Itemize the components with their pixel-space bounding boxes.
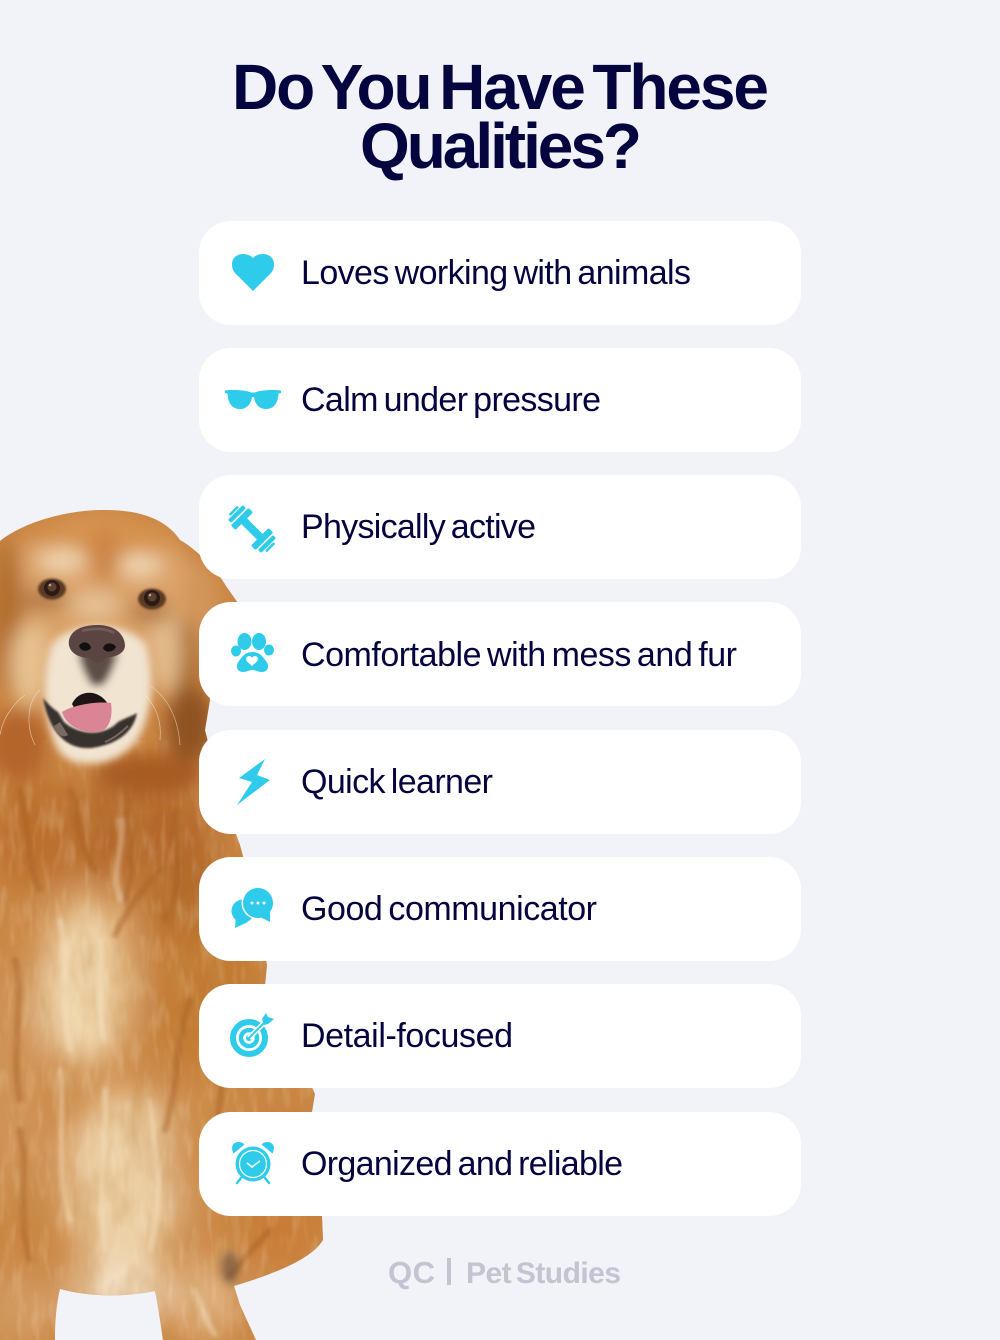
mouth bbox=[43, 693, 137, 748]
whiskers bbox=[0, 686, 180, 745]
label: quick learner: Quick learner bbox=[301, 763, 493, 801]
label: comfortable with mess and fur: Comfortable with mess and fur bbox=[301, 636, 737, 674]
label: organized and reliable: Organized and reliable bbox=[301, 1145, 623, 1183]
icon: lightning bolt bbox=[237, 759, 270, 805]
title bbox=[232, 51, 769, 182]
icon: heart bbox=[232, 254, 274, 291]
fur strands bbox=[15, 790, 270, 1335]
icon: chat bubbles bbox=[232, 888, 273, 928]
footer logo: QC | Pet Studies: QC bbox=[388, 1255, 435, 1290]
icon: sunglasses bbox=[225, 390, 281, 409]
label: physically active: Physically active bbox=[301, 508, 536, 546]
title: Qualities? bbox=[360, 110, 642, 182]
label: detail-focused: Detail-focused bbox=[301, 1017, 513, 1055]
card: quick learner bbox=[199, 730, 801, 834]
icon: target with arrow bbox=[230, 1013, 274, 1057]
title: Do You Have These bbox=[232, 51, 769, 123]
paw shadow bbox=[221, 1252, 239, 1284]
card: organized and reliable bbox=[199, 1112, 801, 1216]
muzzle bbox=[44, 626, 152, 764]
icon: dumbbell bbox=[228, 506, 276, 552]
photo: golden retriever bbox=[0, 510, 323, 1340]
eyes bbox=[38, 578, 166, 610]
card: physically active bbox=[199, 475, 801, 579]
label: loves working with animals: Loves working with animals bbox=[301, 254, 691, 292]
nose bbox=[69, 625, 125, 662]
footer logo: QC | Pet Studies: Pet Studies bbox=[466, 1257, 621, 1290]
tongue bbox=[62, 702, 112, 732]
footer logo: QC | Pet Studies bbox=[388, 1255, 621, 1290]
card: calm under pressure bbox=[199, 348, 801, 452]
broad colour regions bbox=[0, 770, 325, 1340]
icon: alarm clock bbox=[232, 1142, 274, 1184]
label: good communicator: Good communicator bbox=[301, 890, 597, 928]
label: calm under pressure: Calm under pressure bbox=[301, 381, 601, 419]
icon: paw with heart bbox=[231, 633, 274, 672]
card: comfortable with mess and fur bbox=[199, 602, 801, 706]
card: loves working with animals bbox=[199, 221, 801, 325]
face colours bbox=[0, 515, 218, 797]
card: good communicator bbox=[199, 857, 801, 961]
card: detail-focused bbox=[199, 984, 801, 1088]
